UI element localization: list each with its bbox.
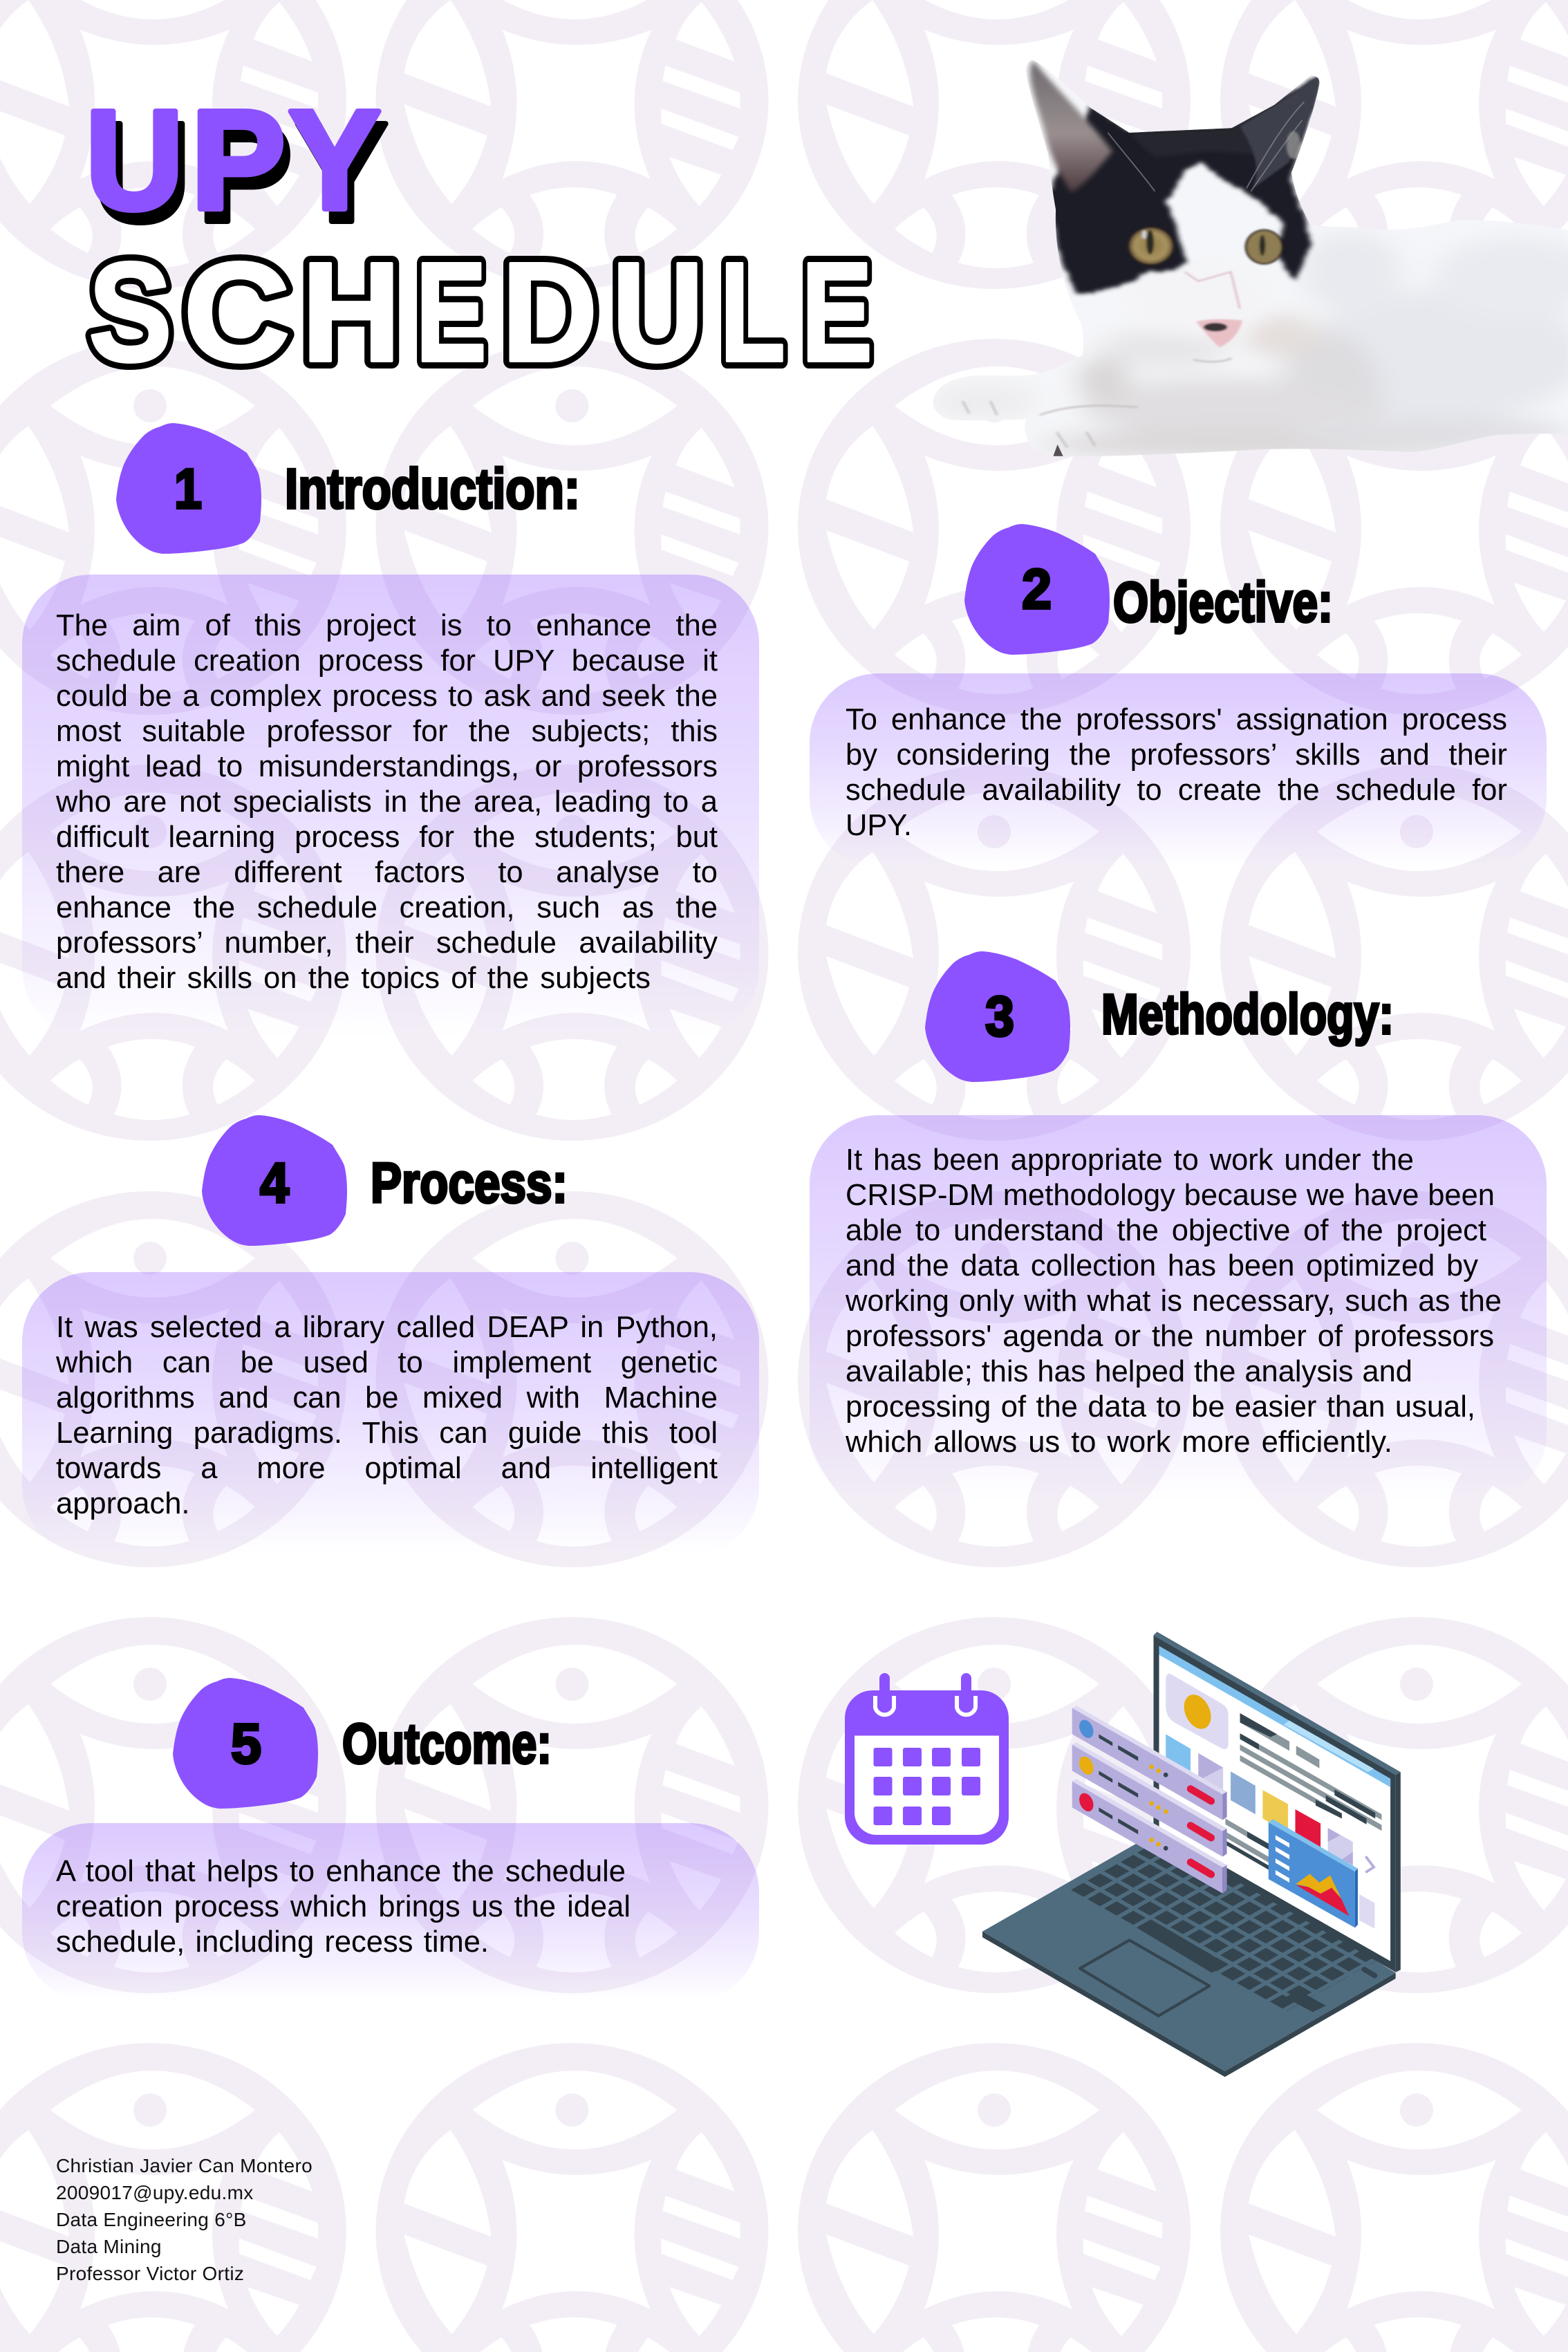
text: introduction body: professors’ number, their schedule availability [56, 926, 718, 960]
badge: number 4: 4 [260, 1152, 289, 1215]
text: process body: algorithms and can be mixed with Machine [56, 1381, 718, 1415]
title: SCHEDULE: L [720, 233, 785, 391]
text: methodology body: available; this has helped the analysis and [846, 1355, 1412, 1388]
heading: Outcome: Outcome: [342, 1712, 552, 1775]
text: introduction body: difficult learning process for the students; but [56, 821, 718, 854]
text: author credits: Data Mining [56, 2236, 162, 2257]
text: outcome body [56, 1855, 631, 1959]
title: UPY: P [198, 93, 292, 252]
heading: Process: Process: [371, 1152, 568, 1215]
badge: number 3 [925, 951, 1070, 1082]
text: process body: Learning paradigms. This can guide this tool [56, 1417, 718, 1450]
title: SCHEDULE: D [502, 233, 597, 391]
title: SCHEDULE: C [183, 233, 290, 391]
floating server strips [1072, 1706, 1227, 1894]
text: methodology body: processing of the data to be easier than usual, [846, 1390, 1475, 1424]
text: introduction body: there are different factors to analyse to [56, 856, 718, 889]
title: SCHEDULE: E [801, 233, 872, 391]
illustration: laptop with dashboard [982, 1632, 1401, 2077]
text: introduction body: The aim of this project is to enhance the [56, 609, 718, 642]
text: objective body [846, 703, 1507, 842]
text: methodology body: which allows us to work more efficiently. [846, 1426, 1392, 1459]
text: author credits: 2009017@upy.edu.mx [56, 2182, 253, 2203]
title: SCHEDULE: E [416, 233, 487, 391]
badge: number 4 [202, 1115, 347, 1246]
text: process body: which can be used to implement genetic [56, 1346, 718, 1379]
photo: black and white cat [933, 60, 1568, 456]
title: UPY: U [93, 93, 191, 252]
heading: Introduction: Introduction: [285, 458, 580, 521]
title: SCHEDULE: C [183, 233, 290, 391]
icon: calendar [845, 1673, 1009, 1845]
title: UPY: Y [288, 81, 381, 239]
laptop screen [1154, 1632, 1401, 1972]
text: methodology body: professors' agenda or the number of professors [846, 1320, 1494, 1353]
text: author credits: Data Engineering 6°B [56, 2209, 247, 2230]
title: SCHEDULE: L [720, 233, 785, 391]
badge: number 1: 1 [174, 458, 202, 521]
title: SCHEDULE: S [88, 233, 172, 391]
panel: objective [810, 673, 1547, 867]
title: UPY: U [86, 81, 184, 239]
text: process body: towards a more optimal and intelligent [56, 1452, 718, 1485]
text: author credits [56, 2155, 312, 2284]
badge: number 2: 2 [1022, 558, 1052, 621]
text: introduction body: could be a complex process to ask and seek the [56, 680, 718, 713]
text: methodology body: able to understand the objective of the project [846, 1214, 1486, 1247]
panel: methodology [810, 1115, 1547, 1502]
title: SCHEDULE: S [88, 233, 172, 391]
title: SCHEDULE [88, 233, 872, 391]
floating chart card [1269, 1819, 1358, 1928]
title: SCHEDULE: E [801, 233, 872, 391]
text: introduction body: who are not specialists in the area, leading to a [56, 785, 718, 819]
title: SCHEDULE: H [301, 233, 401, 391]
badge: number 2 [964, 524, 1110, 655]
text: introduction body: might lead to misunderstandings, or professors [56, 750, 718, 783]
panel: outcome [22, 1823, 759, 2001]
text: process body: It was selected a library called DEAP in Python, [56, 1311, 718, 1344]
laptop base [982, 1830, 1396, 2077]
text: objective body: To enhance the professors' assignation process [846, 703, 1507, 736]
text: methodology body [846, 1144, 1502, 1459]
text: introduction body: schedule creation process for UPY because it [56, 644, 718, 678]
title: SCHEDULE: E [416, 233, 487, 391]
text: introduction body: and their skills on the topics of the subjects [56, 962, 651, 995]
text: objective body: schedule availability to create the schedule for [846, 774, 1507, 807]
text: process body: approach. [56, 1487, 189, 1520]
text: methodology body: It has been appropriate to work under the [846, 1144, 1414, 1177]
text: introduction body: most suitable professor for the subjects; this [56, 715, 718, 748]
text: author credits: Christian Javier Can Montero [56, 2155, 312, 2176]
badge: number 5 [173, 1678, 318, 1809]
text: introduction body: enhance the schedule creation, such as the [56, 891, 718, 924]
badge: number 5: 5 [231, 1712, 261, 1775]
text: objective body: UPY. [846, 809, 912, 842]
text: process body [56, 1311, 718, 1520]
text: methodology body: CRISP-DM methodology because we have been [846, 1179, 1495, 1212]
heading: Objective: Objective: [1113, 571, 1333, 634]
text: outcome body: creation process which brings us the ideal [56, 1890, 631, 1923]
text: outcome body: A tool that helps to enhance the schedule [56, 1855, 626, 1888]
title: SCHEDULE: D [502, 233, 597, 391]
text: methodology body: and the data collection has been optimized by [846, 1249, 1478, 1282]
title: SCHEDULE: U [612, 233, 704, 391]
text: outcome body: schedule, including recess time. [56, 1925, 489, 1959]
title: UPY: P [191, 81, 286, 239]
text: author credits: Professor Victor Ortiz [56, 2263, 244, 2284]
panel: process [22, 1272, 759, 1556]
text: introduction body [56, 609, 718, 995]
title: UPY [86, 81, 388, 252]
title: UPY: Y [295, 93, 388, 252]
panel: introduction [22, 575, 759, 1038]
badge: number 1 [116, 423, 261, 554]
text: methodology body: working only with what is necessary, such as the [846, 1285, 1502, 1318]
title: SCHEDULE: U [612, 233, 704, 391]
title: SCHEDULE: H [301, 233, 401, 391]
badge: number 3: 3 [985, 985, 1014, 1048]
text: objective body: by considering the professors’ skills and their [846, 738, 1507, 772]
heading: Methodology: Methodology: [1101, 983, 1394, 1046]
